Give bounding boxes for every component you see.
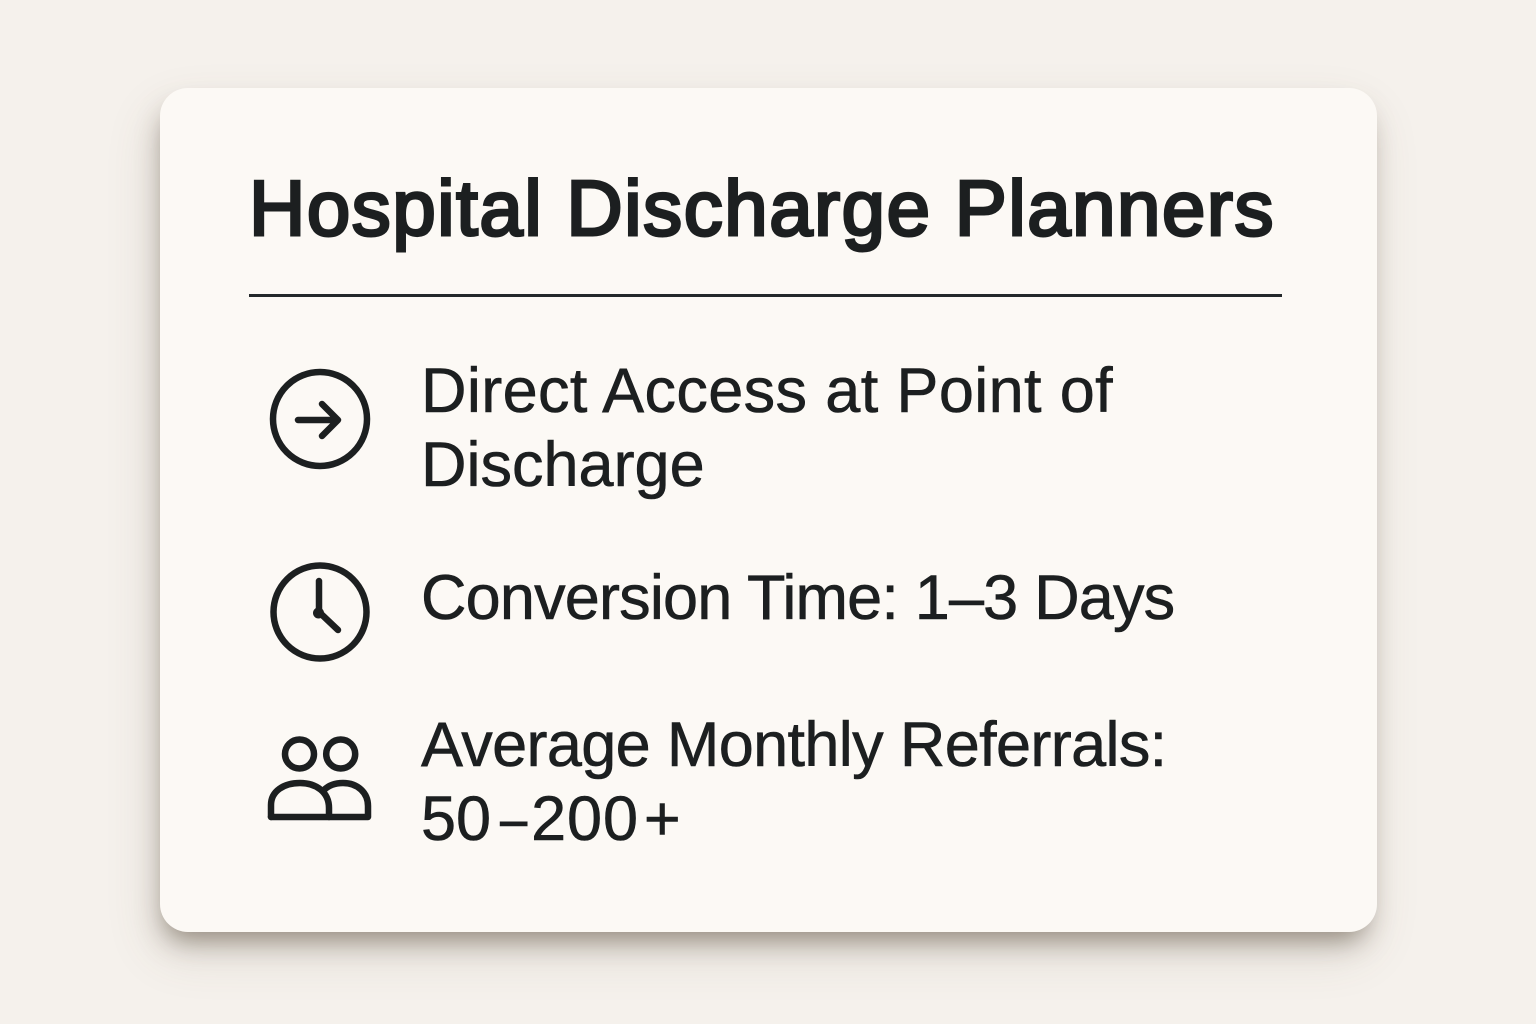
icon: arrow in circle [270,368,370,470]
title: Hospital Discharge Planners [249,164,1275,252]
text: monthly referrals: Average Monthly Referrals: [421,710,1167,780]
text: conversion time: Conversion Time: 1–3 Days [421,563,1174,633]
text: monthly referrals: – [500,784,527,854]
panel: card [160,88,1377,932]
icon: people [268,736,372,820]
text: direct access: Direct Access at Point of [421,356,1113,426]
text: direct access [421,356,1113,500]
text: direct access: Discharge [421,430,705,500]
text: monthly referrals: 50 200+ [421,784,681,854]
icon: clock [270,562,370,662]
text: monthly referrals [420,710,1167,854]
title divider [249,294,1282,297]
